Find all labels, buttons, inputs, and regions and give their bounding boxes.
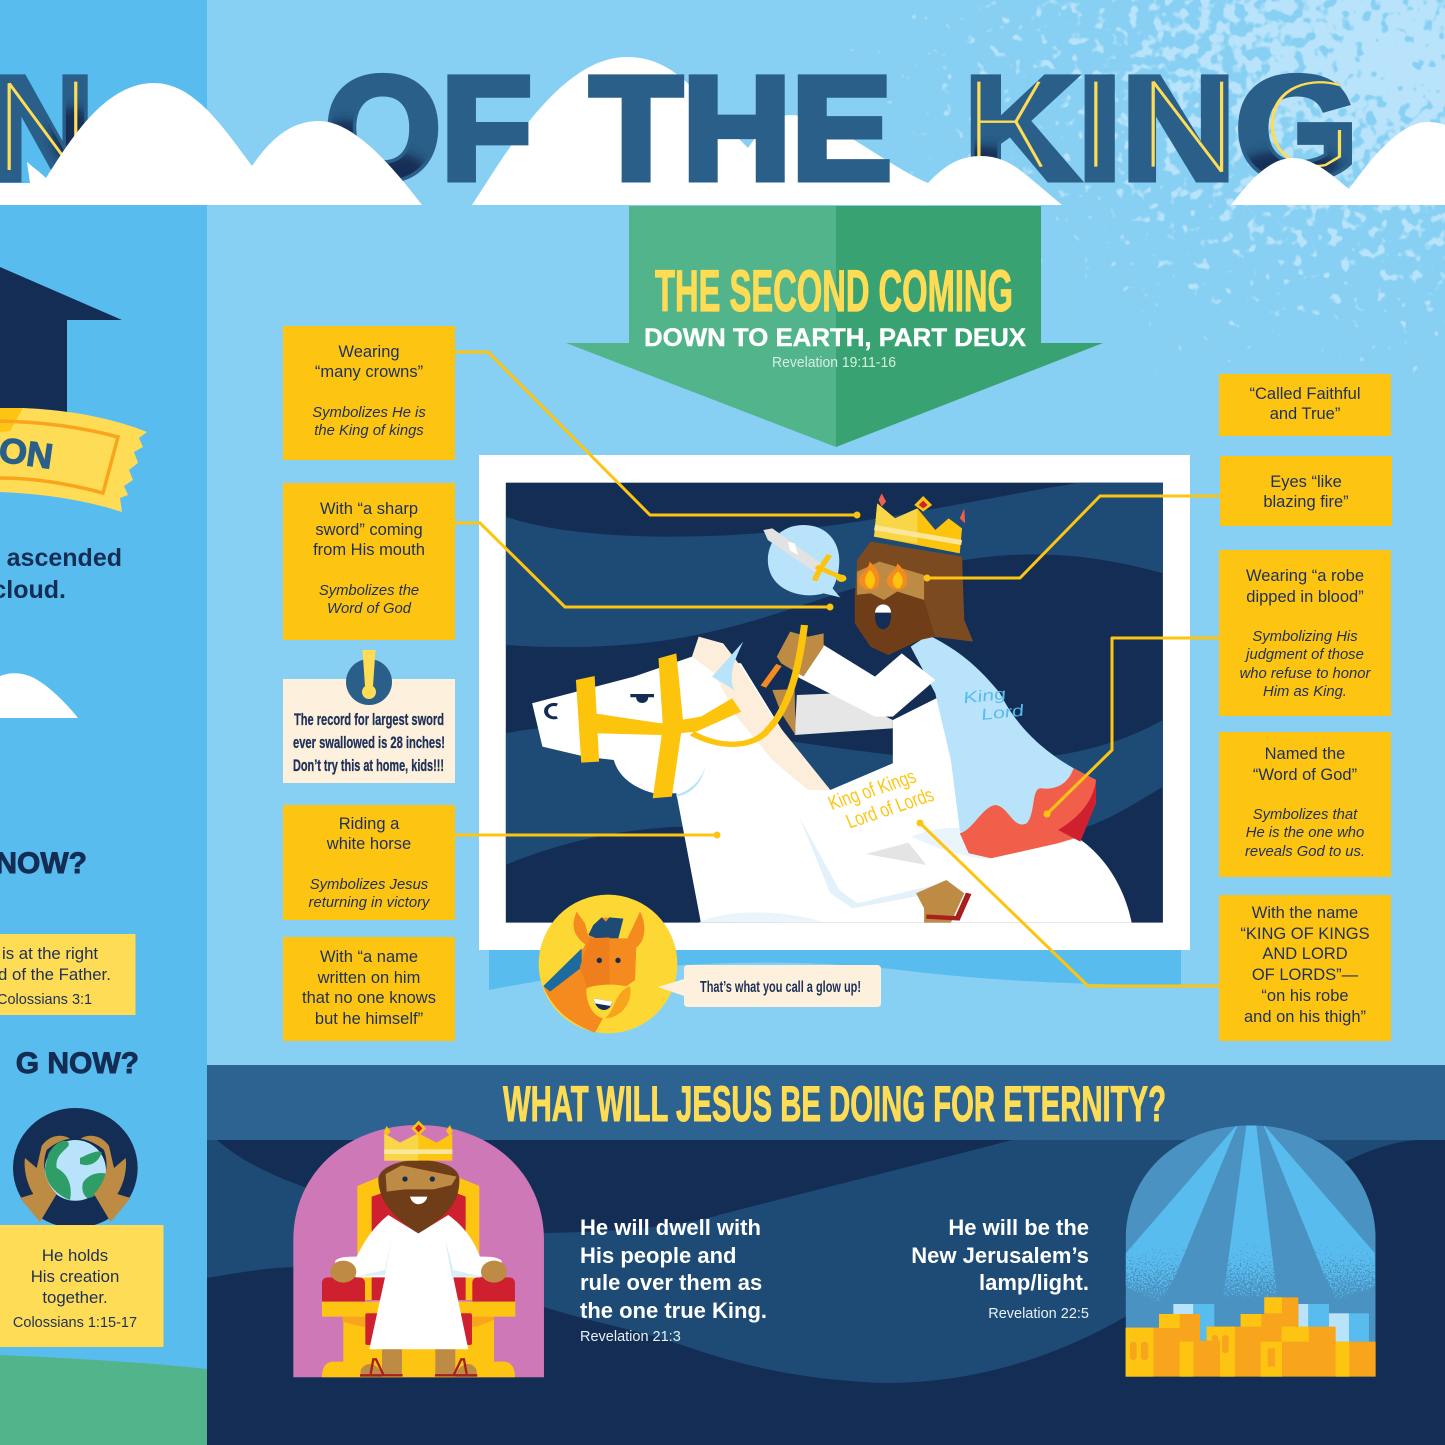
callout: sharp sword <box>283 483 455 640</box>
text: lamp and light: New Jerusalem’s <box>911 1243 1089 1268</box>
text: dwell with His people: He will dwell with <box>580 1215 761 1240</box>
fun fact note: The record for largest sword <box>294 710 444 729</box>
text: lamp and light: He will be the <box>948 1215 1089 1240</box>
callout: many crowns: “many crowns” <box>315 363 423 381</box>
box: right hand: is at the right <box>2 944 98 963</box>
callout: blazing eyes <box>1220 456 1392 526</box>
face <box>857 562 924 600</box>
icon: hands holding globe <box>13 1108 138 1228</box>
text: dwell with His people: Revelation 21:3 <box>580 1329 681 1345</box>
band <box>207 1065 1445 1140</box>
icon: exclamation <box>346 650 392 705</box>
callout: name written: written on him <box>317 969 420 987</box>
title: THE <box>590 47 892 211</box>
horse body <box>532 657 1132 923</box>
callout: name written: but he himself” <box>315 1010 423 1028</box>
ground <box>0 1355 207 1445</box>
reference: Revelation 19:11-16 <box>772 355 896 371</box>
clouds in front of title <box>0 83 1445 205</box>
arrow: the second coming <box>566 206 1103 447</box>
robe lettering: King of Kings <box>823 765 921 814</box>
waves <box>207 1140 1417 1383</box>
panel: eternity <box>207 1065 1445 1445</box>
callout: sharp sword: sword” coming <box>315 521 423 539</box>
foot <box>916 880 964 923</box>
text: ascended <box>0 544 122 604</box>
heading: THE SECOND COMING <box>655 259 1013 324</box>
callout: white horse: white horse <box>326 835 411 853</box>
callout: robe dipped in blood: Wearing “a robe <box>1246 567 1364 585</box>
callout: word of God <box>1219 732 1391 877</box>
callout: sharp sword: from His mouth <box>313 541 425 559</box>
callout: white horse: Riding a <box>339 815 400 833</box>
cloud <box>0 673 78 718</box>
cape text: King <box>962 685 1008 707</box>
box: holds creation: Colossians 1:15-17 <box>13 1315 137 1331</box>
text: ascended: ascended <box>7 544 122 572</box>
callout: king of kings: “on his robe <box>1261 987 1349 1005</box>
horse shading <box>699 912 821 923</box>
callout: robe dipped in blood: dipped in blood” <box>1246 588 1364 606</box>
callout: white horse: returning in victory <box>309 895 431 911</box>
text: dwell with His people: rule over them as <box>580 1270 762 1295</box>
callout: robe dipped in blood: who refuse to honor <box>1240 666 1371 682</box>
cloud behind title <box>472 57 970 205</box>
subheading: DOWN TO EARTH, PART DEUX <box>644 324 1026 352</box>
callout: sharp sword: Symbolizes the <box>319 583 419 599</box>
callout: name written: With “a name <box>320 948 418 966</box>
callout: faithful and true: “Called Faithful <box>1250 385 1360 403</box>
callout: robe dipped in blood: Symbolizing His <box>1252 629 1358 645</box>
title: KING <box>964 47 1358 211</box>
box: holds creation: His creation <box>31 1267 119 1286</box>
callout: king of kings: OF LORDS”— <box>1252 966 1359 984</box>
callout: faithful and true <box>1219 374 1391 436</box>
frame shadow <box>489 950 1181 990</box>
callout: king of kings: and on his thigh” <box>1244 1008 1366 1026</box>
title shading <box>52 107 1340 186</box>
light beams <box>1126 1123 1238 1303</box>
callout: word of God: “Word of God” <box>1253 766 1357 784</box>
speckle texture: top right <box>780 0 1445 440</box>
text: lamp and light <box>911 1215 1089 1322</box>
hands <box>330 1261 356 1283</box>
fun fact note: ever swallowed is 28 inches! <box>293 733 445 752</box>
crown gems <box>914 496 932 512</box>
callout: word of God: Named the <box>1265 745 1345 763</box>
callout: name written: that no one knows <box>302 989 436 1007</box>
callout: robe dipped in blood: judgment of those <box>1244 647 1364 663</box>
box: holds creation: together. <box>42 1288 108 1307</box>
ear <box>712 642 743 690</box>
ribbon banner <box>0 408 147 512</box>
cape <box>911 635 1096 858</box>
callout: king of kings <box>1219 895 1391 1041</box>
heading: doing now: G NOW? <box>16 1047 139 1080</box>
fun fact note: Don’t try this at home, kids!!! <box>293 756 444 775</box>
callout: sharp sword: With “a sharp <box>320 500 418 518</box>
title <box>0 47 1358 211</box>
hair <box>855 542 973 655</box>
callout: white horse <box>283 805 455 920</box>
callout: blazing eyes: blazing fire” <box>1263 493 1349 511</box>
callout: many crowns <box>283 326 455 460</box>
icon: dark house roof <box>0 267 122 412</box>
title inline: K I N G <box>979 82 1339 172</box>
text: dwell with His people: His people and <box>580 1243 736 1268</box>
callout: king of kings: “KING OF KINGS <box>1240 925 1370 943</box>
donkey mascot <box>539 895 677 1033</box>
blood hem <box>960 768 1096 858</box>
callout lines with dots <box>455 352 1220 986</box>
callout: many crowns: Symbolizes He is <box>312 405 426 421</box>
box: right hand <box>0 934 136 1015</box>
legs and sandals <box>382 1349 402 1375</box>
beard <box>855 592 935 655</box>
callout: many crowns: the King of kings <box>314 423 424 439</box>
box: right hand: d of the Father. <box>0 965 111 984</box>
speech bubble: glow up: That’s what you call a glow up! <box>700 979 861 996</box>
callout: word of God: He is the one who <box>1246 825 1364 841</box>
crown <box>874 503 962 553</box>
illustration: Jesus on white horse: Lord of Lords <box>841 784 938 832</box>
illustration: Jesus on white horse <box>506 483 1163 923</box>
text: lamp and light: Revelation 22:5 <box>988 1306 1089 1322</box>
callout: robe dipped in blood <box>1219 550 1391 716</box>
callout: word of God: Symbolizes that <box>1253 807 1358 823</box>
text: dwell with His people <box>580 1215 767 1345</box>
fun fact note <box>283 650 455 783</box>
callout: word of God: reveals God to us. <box>1245 844 1365 860</box>
illustration: Jesus enthroned <box>293 1121 544 1377</box>
crown <box>384 1133 452 1161</box>
title inline: N <box>9 82 76 170</box>
callout: blazing eyes: Eyes “like <box>1270 473 1342 491</box>
text: lamp and light: lamp/light. <box>979 1270 1089 1295</box>
callout: sharp sword: Word of God <box>327 601 412 617</box>
callout: many crowns: Wearing <box>338 343 400 361</box>
picture frame <box>479 455 1190 950</box>
horse bridle <box>576 676 599 763</box>
flame eyes <box>858 562 879 590</box>
illustration: Jesus on white horse: Lord <box>980 702 1026 724</box>
mouth <box>875 604 891 629</box>
horse mane <box>692 637 830 790</box>
callout: robe dipped in blood: Him as King. <box>1263 684 1347 700</box>
illustration: New Jerusalem <box>1126 1123 1376 1378</box>
head and beard <box>378 1160 459 1233</box>
beam grain <box>1126 1244 1375 1324</box>
callout: king of kings: AND LORD <box>1262 945 1348 963</box>
speech bubble with sword <box>768 525 840 597</box>
city <box>1126 1297 1376 1377</box>
far arm <box>795 693 893 735</box>
throne <box>357 1177 479 1300</box>
callout: king of kings: With the name <box>1252 904 1358 922</box>
callout: white horse: Symbolizes Jesus <box>310 877 429 893</box>
panel: left column <box>0 0 207 1445</box>
callout: faithful and true: and True” <box>1270 405 1340 423</box>
horse eye and nostril <box>630 694 654 703</box>
night waves <box>506 483 1163 647</box>
near hand and reins <box>763 665 779 687</box>
callout: name written <box>283 937 455 1041</box>
box: holds creation <box>0 1225 164 1347</box>
text: dwell with His people: the one true King. <box>580 1298 767 1323</box>
robe arm <box>797 645 935 717</box>
robe <box>335 1215 502 1349</box>
title: OF <box>325 47 532 211</box>
speech bubble: glow up <box>658 965 881 1007</box>
box: holds creation: He holds <box>42 1246 108 1265</box>
